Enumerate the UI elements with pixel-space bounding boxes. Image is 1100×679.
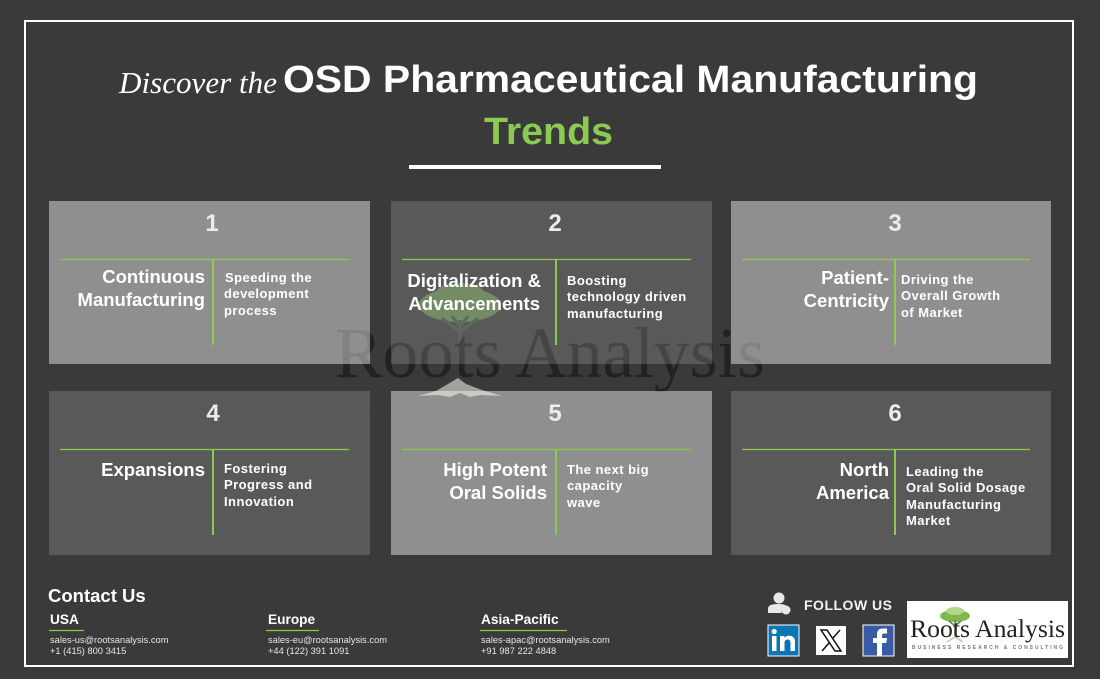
watermark: Roots Analysis: [335, 313, 765, 393]
contact: USA: sales-us@rootsanalysis.com: [50, 635, 169, 645]
panel: card 3: Overall Growth: [901, 288, 1000, 303]
panel: card 3: of Market: [901, 305, 963, 320]
contact: Asia-Pacific: [480, 612, 610, 656]
panel: card 6: America: [816, 482, 890, 503]
panel: card 6: [742, 400, 1030, 535]
panel: card 2: Digitalization &: [407, 270, 541, 291]
panel: card 3: Patient-: [821, 267, 889, 288]
panel: card 4: [60, 400, 349, 535]
panel: card 6: Market: [906, 513, 951, 528]
logo: Roots Analysis: Roots Analysis: [910, 616, 1065, 643]
panel: card 1: process: [224, 303, 277, 318]
icon: X: [816, 626, 846, 655]
watermark: [335, 283, 765, 416]
panel: card 6: Leading the: [906, 464, 984, 479]
contact: Asia-Pacific: +91 987 222 4848: [481, 646, 556, 656]
title: OSD Pharmaceutical Manufacturing: [283, 59, 978, 101]
contact: USA: +1 (415) 800 3415: [50, 646, 126, 656]
panel: card 5: High Potent: [443, 459, 547, 480]
icon: linkedin: [768, 625, 799, 656]
contact: USA: USA: [50, 612, 79, 627]
panel: card 2: technology driven: [567, 289, 687, 304]
panel: card 3: [742, 210, 1030, 345]
panel: card 6: North: [840, 459, 889, 480]
panel: card 2: manufacturing: [567, 306, 663, 321]
contact: Europe: [266, 612, 387, 656]
heading: contact us: Contact Us: [48, 585, 146, 606]
panel: card 2: Advancements: [408, 293, 540, 314]
panel: card 3: Driving the: [901, 272, 974, 287]
panel: card backgrounds: [49, 201, 1051, 555]
panel: card 1: Speeding the: [225, 270, 312, 285]
panel: card 5: [402, 400, 691, 535]
contact: USA: [49, 612, 169, 656]
panel: card 5: capacity: [567, 478, 623, 493]
panel: card 5: 5: [548, 400, 562, 427]
title: Trends: [484, 111, 613, 153]
panel: card 1: Continuous: [102, 266, 205, 287]
panel: card 4: Innovation: [224, 494, 294, 509]
contact: Europe: +44 (122) 391 1091: [268, 646, 349, 656]
panel: card 4: Expansions: [101, 459, 205, 480]
panel: card 4: Fostering: [224, 461, 287, 476]
panel: card 5: The next big: [567, 462, 649, 477]
icon: person add: [768, 592, 790, 614]
panel: card 5: Oral Solids: [449, 482, 547, 503]
panel: card 6: Oral Solid Dosage: [906, 480, 1026, 495]
title: Discover the: [118, 65, 277, 100]
panel: card 4: Progress and: [224, 477, 312, 492]
contact: Asia-Pacific: Asia-Pacific: [481, 612, 559, 627]
panel: card 2: 2: [548, 210, 562, 237]
panel: card 2: [402, 210, 691, 345]
logo: Roots Analysis: BUSINESS RESEARCH & CONSULTING: [912, 645, 1063, 651]
panel: card 1: Manufacturing: [78, 289, 205, 310]
panel: card 1: development: [224, 286, 309, 301]
panel: card 2: Boosting: [567, 273, 627, 288]
panel: card 1: 1: [205, 210, 219, 237]
panel: card 3: Centricity: [804, 290, 890, 311]
panel: card 6: Manufacturing: [906, 497, 1001, 512]
contact: Asia-Pacific: sales-apac@rootsanalysis.com: [481, 635, 610, 645]
text: follow us: FOLLOW US: [804, 597, 892, 613]
panel: card 3: 3: [888, 210, 902, 237]
panel: card 6: 6: [888, 400, 902, 427]
watermark: BUSINESS RESEARCH & CONSULTING: [337, 406, 763, 416]
icon: facebook: [863, 625, 894, 656]
logo: Roots Analysis: [907, 601, 1068, 658]
contact: Europe: sales-eu@rootsanalysis.com: [268, 635, 387, 645]
contact: Europe: Europe: [268, 612, 316, 627]
panel: card 4: 4: [206, 400, 220, 427]
title: [118, 59, 978, 169]
panel: card 5: wave: [566, 495, 601, 510]
panel: card 1: [60, 210, 349, 345]
